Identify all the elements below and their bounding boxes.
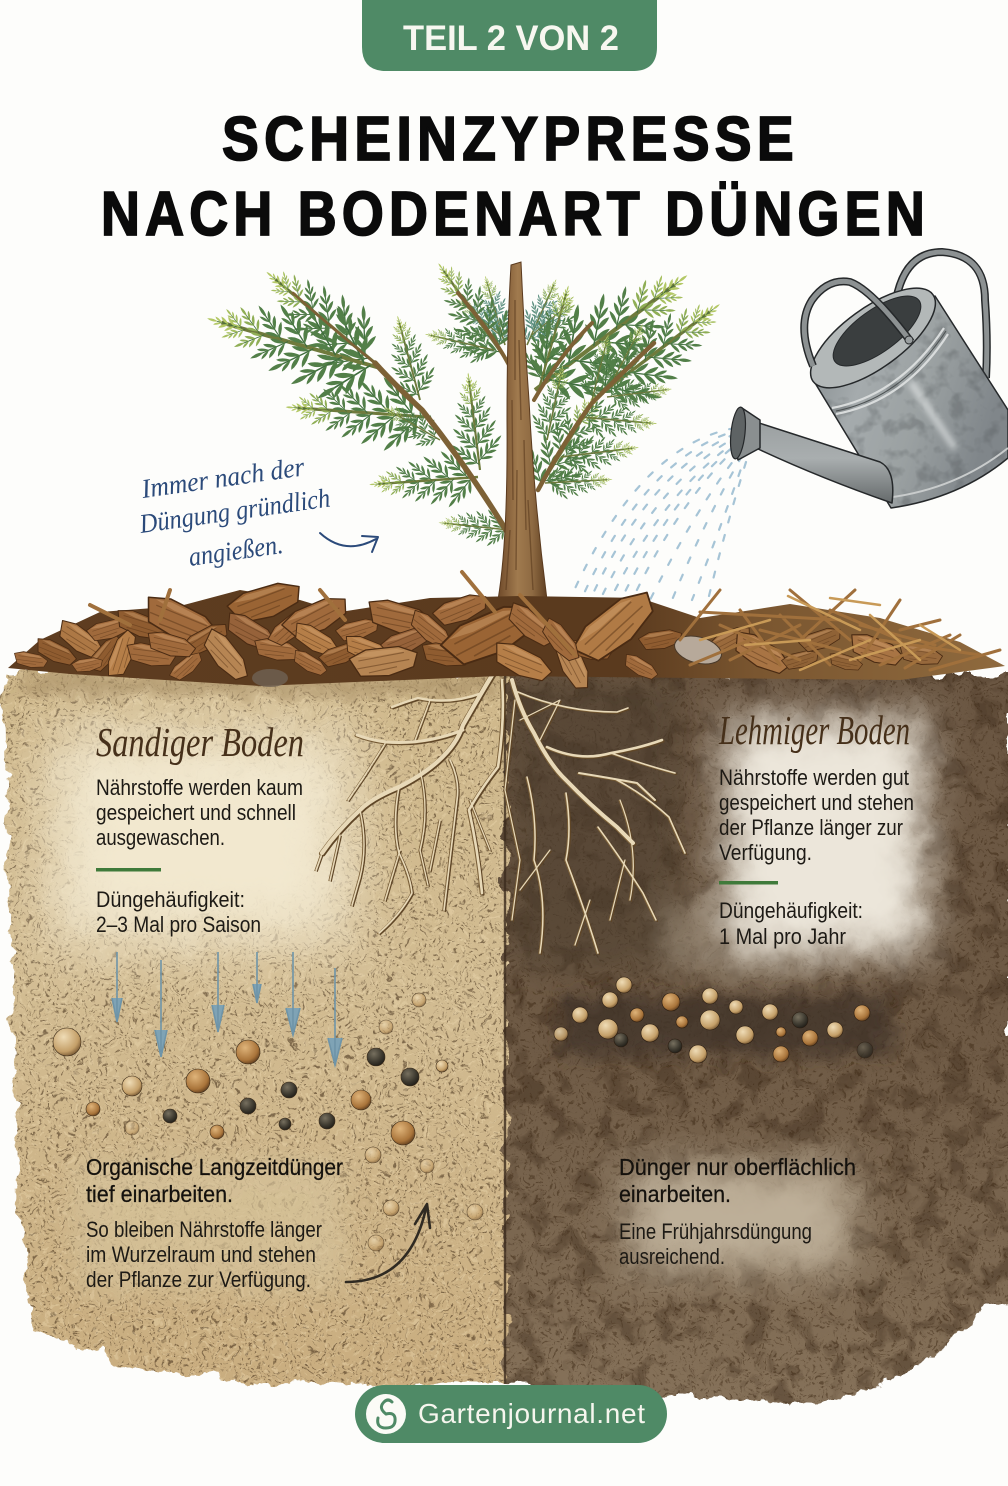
loamy soil description [719,765,914,865]
callout: loamy soil advice: einarbeiten. [619,1181,731,1207]
fertilizer pellets: loamy soil [554,977,873,1063]
loamy soil frequency [719,898,863,949]
callout: loamy soil advice: ausreichend. [619,1244,725,1269]
sandy soil description [96,775,303,850]
can bands [832,328,948,414]
loamy soil frequency: 1 Mal pro Jahr [719,924,846,949]
tree [192,227,749,600]
callout: sandy soil advice [86,1154,343,1292]
callout: sandy soil advice: im Wurzelraum und stehen [86,1242,316,1267]
callout: sandy soil advice: So bleiben Nährstoffe länger [86,1217,322,1242]
opening [795,270,951,406]
sandy soil frequency: Düngehäufigkeit: [96,887,245,912]
loamy soil description: der Pflanze länger zur [719,815,903,840]
note: handwritten reminder [137,451,332,572]
bark stones [671,631,725,669]
sandy soil description: ausgewaschen. [96,825,225,850]
top badge: part label: TEIL 2 VON 2 [403,19,619,58]
soil cross-section [0,670,1008,1410]
top badge: part label [362,0,657,71]
tree roots [315,672,686,954]
bark chips [13,576,944,694]
watering can [728,252,1008,510]
loamy soil description: Verfügung. [719,840,812,865]
rear handle [896,252,987,378]
callout: loamy soil advice: Eine Frühjahrsdüngung [619,1219,812,1244]
callout: sandy soil advice: der Pflanze zur Verfügung. [86,1267,311,1292]
trunk bark [506,300,533,590]
footer badge: website [355,1385,667,1443]
panel: loamy soil text [718,707,914,949]
divider: sandy soil [96,868,161,872]
sandy soil description: Nährstoffe werden kaum [96,775,303,800]
footer badge: website: Gartenjournal.net [418,1398,645,1429]
title [101,105,930,249]
callout: loamy soil advice [619,1154,856,1269]
branches [293,293,654,540]
note: handwritten reminder: Immer nach der [139,451,307,504]
loamy soil description: Nährstoffe werden gut [719,765,909,790]
divider: loamy soil [719,881,778,884]
body [812,296,1008,508]
water seep arrows [112,952,342,1065]
callout: loamy soil advice: Dünger nur oberflächlich [619,1154,856,1180]
arrow: rising nutrients [346,1204,430,1282]
sandy soil description: gespeichert und schnell [96,800,296,825]
callout: sandy soil advice: tief einarbeiten. [86,1181,233,1207]
bark mulch layer [8,572,1005,694]
twigs [90,572,1000,670]
loamy soil description: gespeichert und stehen [719,790,914,815]
icon: logo [366,1394,406,1434]
rose [735,408,760,460]
heading: sandy soil: Sandiger Boden [96,719,304,765]
divider between soils [504,675,506,1384]
note: handwritten reminder: angießen. [187,529,285,572]
bottom rim [885,448,1008,498]
sandy soil panel [0,670,510,1390]
bail handle [804,281,911,366]
title: SCHEINZYPRESSE [222,105,799,174]
can patina [826,313,1005,506]
foliage [192,227,749,552]
loamy soil frequency: Düngehäufigkeit: [719,898,863,923]
water stream [572,428,746,600]
mulch base [8,590,1005,686]
sandy soil frequency: 2–3 Mal pro Saison [96,912,261,937]
spout [756,422,893,503]
sandy soil frequency [96,887,261,937]
note: handwritten reminder: Düngung gründlich [137,483,332,539]
panel: sandy soil text [96,719,304,937]
fertilizer pellets: sandy soil [53,993,483,1251]
callout: sandy soil advice: Organische Langzeitdünger [86,1154,343,1180]
loamy soil panel [506,670,1008,1410]
heading: loamy soil: Lehmiger Boden [718,707,910,753]
trunk [498,262,547,600]
arrow: note to tree [320,533,378,552]
